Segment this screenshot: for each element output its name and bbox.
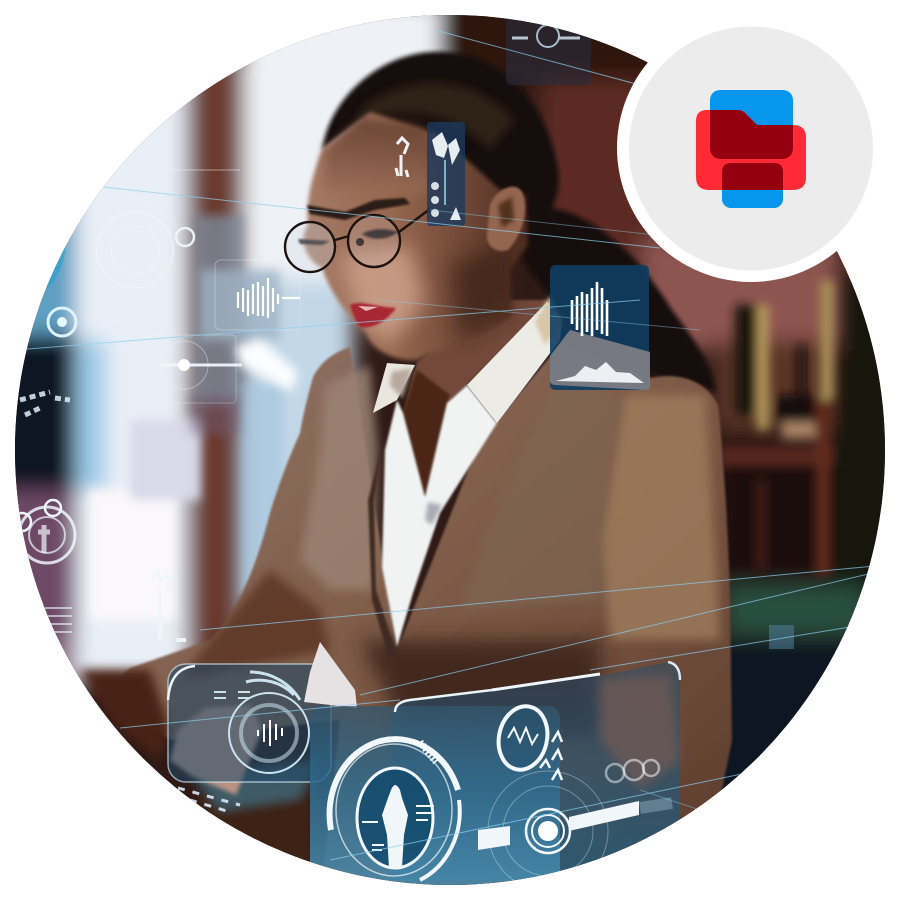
hand and keyboard [80,670,320,885]
head holograms [396,122,465,226]
hair [322,52,716,392]
eyebrow [307,198,410,220]
human scan ring [329,739,460,880]
right dashboard rings and progress bar [478,702,672,891]
waveform hologram panel [550,265,650,390]
left background holograms [13,170,300,643]
badge ring [617,14,885,282]
logo badge [617,14,885,282]
left lower hologram panel [168,664,331,782]
shirt [373,296,562,647]
central hologram panel [310,662,680,896]
small far-right hologram [769,625,794,649]
eyes [298,229,398,245]
glasses [285,209,430,272]
logo mark [696,90,806,208]
badge disc [629,26,873,270]
top hologram panel [506,15,591,85]
shirt hem highlight [304,642,357,708]
ear [487,187,525,251]
face [298,112,528,360]
lips [350,303,396,328]
blazer [105,345,732,900]
neck [403,300,552,497]
